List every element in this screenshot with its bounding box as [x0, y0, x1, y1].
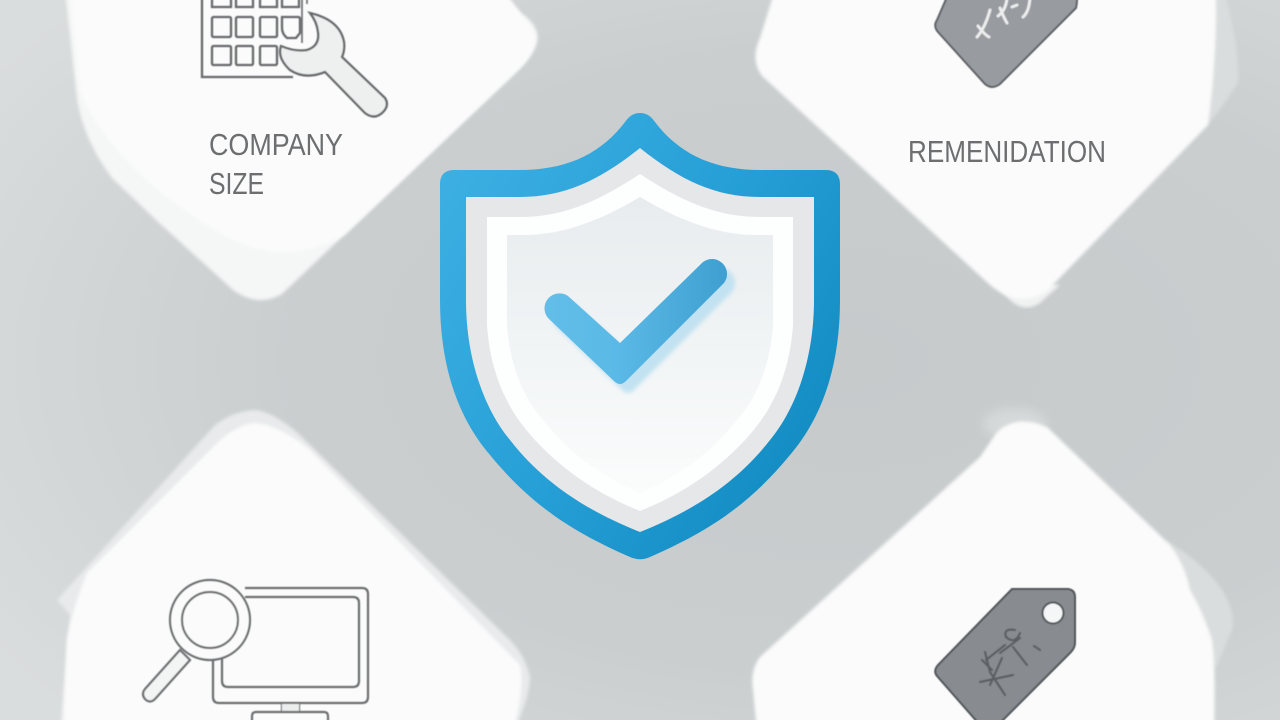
panel: remediation: [755, 0, 1238, 307]
shield inner face: [507, 197, 773, 493]
label: company size: COMPANY: [209, 127, 343, 162]
check mark: [544, 259, 727, 384]
panel: company size: [65, 0, 538, 300]
icon: price tag: [935, 0, 1077, 87]
shield white band: [487, 174, 793, 511]
panel: tag: [752, 408, 1233, 720]
icon: central shield: [440, 113, 840, 559]
panel: monitoring: [57, 410, 530, 720]
icon: price tag with hole: [935, 589, 1075, 720]
shield grey band: [466, 148, 814, 532]
icon: magnifier and monitor: [143, 580, 368, 720]
icon: calendar with wrench: [202, 0, 387, 116]
label: remediation: REMENIDATION: [908, 134, 1106, 169]
shield outer ring: [440, 113, 840, 559]
panel: company size: SIZE: [209, 166, 264, 201]
check mark shadow: [552, 268, 735, 393]
